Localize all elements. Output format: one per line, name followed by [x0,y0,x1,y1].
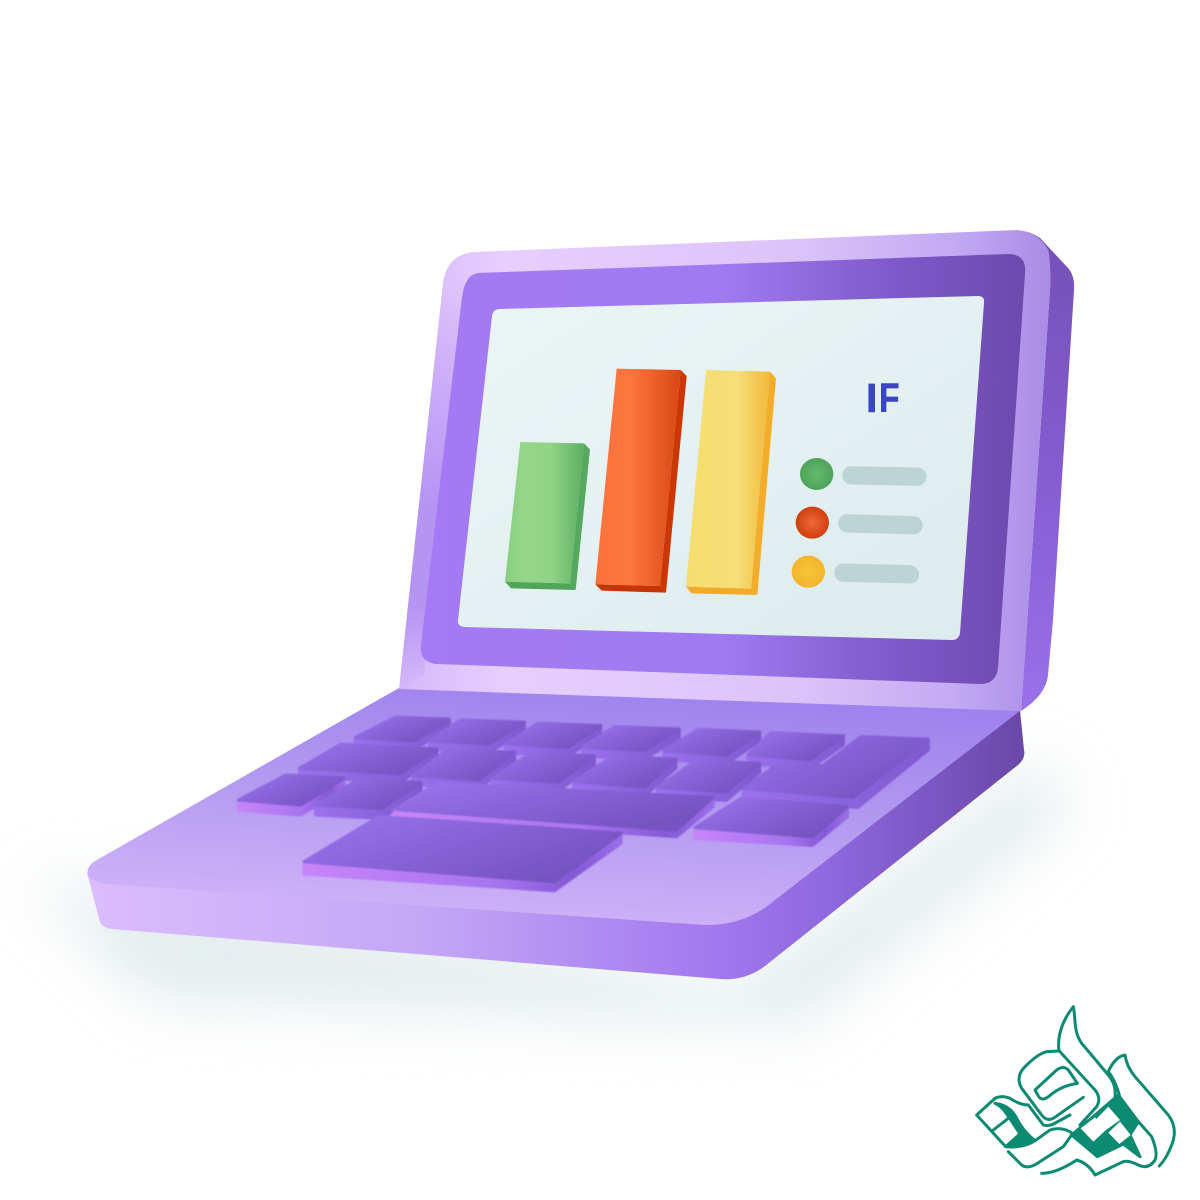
chart legend [792,458,917,588]
base side faces [87,710,1024,979]
keyboard and touchpad [239,717,927,891]
legend item red [796,507,914,539]
key row 2, key 5 [658,761,759,800]
chart title: I [866,375,877,421]
touchpad [305,817,620,891]
ground shadow [30,760,1070,1025]
key row 2, key 2 [413,750,514,788]
lid left band shading [399,283,466,689]
legend item green [800,458,917,490]
logo left squares [977,1097,1028,1147]
logo waves [1035,1129,1075,1141]
bar chart [505,369,776,595]
key row 3, key 1 [239,775,343,815]
base top face [88,688,1021,925]
logo rounded letter [1019,1051,1083,1119]
key row 2, key 1 [300,744,436,782]
logo checker block [1072,1095,1140,1157]
logo right curve [1108,1055,1174,1166]
lid side edge [1017,230,1074,711]
key row 3, key 2 [316,779,420,818]
key row 2, key 4 [574,757,675,795]
key row 1, key 3 [506,723,600,756]
laptop base [87,688,1024,979]
yellow bar [686,370,776,595]
enter key [744,737,927,807]
space bar [395,783,712,837]
key row 1, key 1 [356,717,449,749]
legend item yellow [792,556,910,588]
green bar [505,442,590,590]
chart title: F [879,375,900,421]
key row 1, key 2 [430,720,523,753]
lid front frame [399,230,1050,711]
key row 2, key 3 [493,753,594,790]
calligraphic logo [977,1007,1174,1175]
right lower key [696,798,847,845]
laptop lid [399,230,1074,711]
chart title [866,375,900,421]
screen bezel [421,254,1025,684]
screen [458,296,984,640]
logo spike stroke [1059,1007,1115,1098]
orange bar [595,369,687,593]
key row 1, key 4 [583,727,678,759]
key row 1, key 6 [749,733,843,768]
key row 1, key 5 [665,729,759,764]
